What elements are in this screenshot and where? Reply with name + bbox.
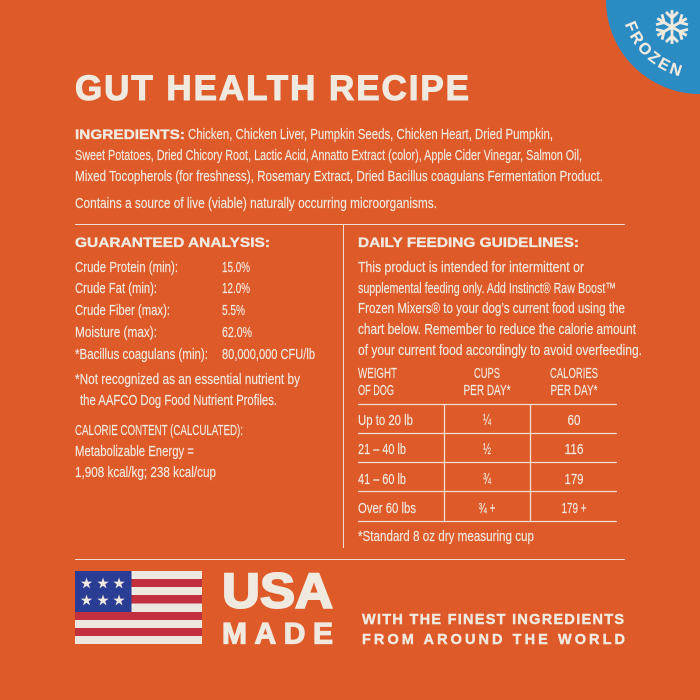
panel: guaranteed analysis: Crude Protein (min): — [75, 259, 178, 276]
calorie content: CALORIE CONTENT (CALCULATED): — [75, 422, 243, 439]
panel: guaranteed analysis: 12.0% — [222, 280, 250, 297]
panel: guaranteed analysis: 5.5% — [222, 302, 245, 319]
badge: frozen — [606, 0, 700, 94]
calorie content — [75, 422, 243, 481]
panel: guaranteed analysis: Crude Fiber (max): — [75, 302, 170, 319]
panel: guaranteed analysis: Moisture (max): — [75, 324, 157, 341]
feeding table: PER DAY* — [550, 382, 598, 399]
panel: guaranteed analysis: 62.0% — [222, 324, 252, 341]
feeding table: CALORIES — [550, 365, 598, 382]
title: GUT HEALTH RECIPE — [75, 69, 469, 108]
feeding table: 41 – 60 lb — [358, 471, 406, 488]
icon: american flag — [75, 571, 202, 644]
badge label: FROZEN: FROZEN — [625, 20, 682, 76]
feeding table: OF DOG — [358, 382, 394, 399]
heading: daily feeding guidelines: DAILY FEEDING GUIDELINES: — [358, 234, 579, 250]
panel: guaranteed analysis — [75, 234, 315, 481]
icon: american flag: ★ — [97, 576, 109, 592]
icon: american flag: ★ — [113, 593, 125, 609]
feeding table: 179 — [564, 471, 584, 488]
ingredients text block — [75, 126, 603, 212]
feeding table: PER DAY* — [464, 382, 511, 399]
icon: american flag: ★ — [80, 593, 93, 609]
icon: snowflake — [654, 10, 690, 44]
calorie content: 1,908 kcal/kg; 238 kcal/cup — [75, 464, 216, 481]
feeding table: ¾ + — [478, 500, 496, 517]
usa made wordmark — [222, 564, 333, 650]
table footnote: *Standard 8 oz dry measuring cup — [358, 528, 534, 545]
heading: guaranteed analysis: GUARANTEED ANALYSIS: — [75, 234, 270, 250]
footnote: AAFCO: the AAFCO Dog Food Nutrient Profiles. — [80, 392, 277, 409]
footnote: AAFCO: *Not recognized as an essential nutrient by — [75, 371, 300, 388]
panel: guaranteed analysis: Crude Fat (min): — [75, 280, 157, 297]
feeding table: 21 – 40 lb — [358, 441, 406, 458]
feeding table: 116 — [564, 441, 584, 458]
feeding table: 179 + — [562, 500, 587, 517]
feeding paragraph: This product is intended for intermittent or — [358, 259, 584, 276]
feeding table: ½ — [483, 441, 491, 458]
feeding table: WEIGHT — [358, 365, 397, 382]
panel: guaranteed analysis: 80,000,000 CFU/lb — [222, 346, 315, 363]
usa made wordmark: MADE — [222, 618, 333, 650]
tagline: WITH THE FINEST INGREDIENTS — [362, 612, 624, 628]
feeding table: Up to 20 lb — [358, 412, 413, 429]
feeding table: 60 — [568, 412, 580, 429]
feeding table: CUPS — [474, 365, 500, 382]
feeding table: ¾ — [483, 471, 491, 488]
ingredients text block: INGREDIENTS: — [75, 126, 185, 142]
usa made wordmark: USA — [222, 564, 333, 618]
footnote: AAFCO — [75, 371, 300, 409]
icon: american flag: ★ — [97, 593, 109, 609]
panel: daily feeding guidelines — [358, 234, 642, 545]
feeding table — [358, 365, 617, 522]
icon: american flag: ★ — [80, 576, 93, 592]
calorie content: Metabolizable Energy = — [75, 443, 194, 460]
ingredients text block: Chicken, Chicken Liver, Pumpkin Seeds, Chicken Heart, Dried Pumpkin, — [188, 126, 553, 143]
feeding paragraph: Frozen Mixers® to your dog’s current food using the — [358, 300, 625, 317]
ingredients text block: Contains a source of live (viable) naturally occurring microorganisms. — [75, 195, 437, 212]
feeding paragraph — [358, 259, 642, 359]
icon: american flag: ★ — [113, 576, 125, 592]
tagline — [362, 612, 625, 648]
feeding table: Over 60 lbs — [358, 500, 416, 517]
panel: guaranteed analysis: *Bacillus coagulans (min): — [75, 346, 208, 363]
panel: guaranteed analysis: 15.0% — [222, 259, 250, 276]
feeding table: ¼ — [483, 412, 491, 429]
tagline: FROM AROUND THE WORLD — [362, 632, 625, 648]
